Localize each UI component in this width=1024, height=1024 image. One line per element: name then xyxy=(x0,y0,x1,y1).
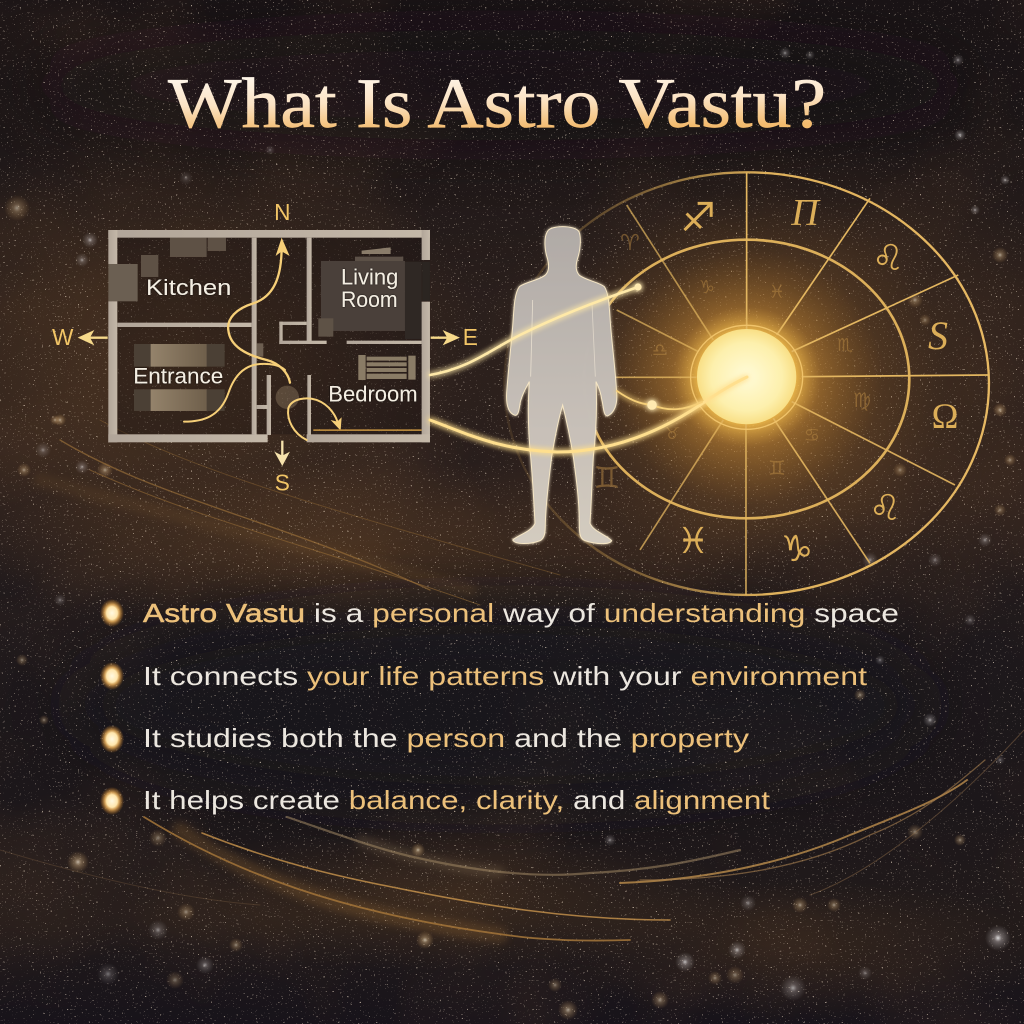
kitchen furniture xyxy=(108,238,226,301)
sun ring xyxy=(691,325,803,429)
room labels: Living xyxy=(341,265,398,290)
outer zodiac glyphs: ♑ xyxy=(781,529,813,570)
energy lines linking plan, person and wheel xyxy=(430,283,747,452)
room labels xyxy=(133,265,418,406)
energy flow arrows xyxy=(184,238,422,440)
bullet 4: It helps create balance, clarity, and alignment xyxy=(143,785,771,815)
inner zodiac glyphs: ♊ xyxy=(768,456,786,480)
living room furniture xyxy=(318,247,422,339)
room labels: Room xyxy=(341,287,398,312)
floor plan xyxy=(52,199,478,496)
human silhouette xyxy=(507,227,617,544)
plan walls xyxy=(108,230,430,442)
outer zodiac glyphs: ♊ xyxy=(594,461,620,496)
outer zodiac glyphs: Ω xyxy=(932,396,958,436)
room labels: Bedroom xyxy=(328,381,418,406)
room labels: Entrance xyxy=(133,363,223,388)
compass: west xyxy=(52,324,108,350)
sun glow xyxy=(612,249,882,505)
compass: west: W xyxy=(52,324,74,350)
bullet 2: It connects your life patterns with your environment xyxy=(143,661,868,691)
background: sweeping gold light trails xyxy=(0,420,1024,941)
plan interior tint xyxy=(117,238,422,434)
outer ring xyxy=(504,172,989,595)
bullet 1: Astro Vastu is a personal way of understanding space xyxy=(143,598,899,628)
outer zodiac glyphs xyxy=(594,192,958,570)
compass: north: N xyxy=(274,199,290,225)
inner zodiac glyphs: ♉ xyxy=(665,424,679,443)
inner zodiac glyphs: ♋ xyxy=(804,425,820,446)
outer zodiac glyphs: ♐ xyxy=(680,195,716,241)
title: What Is Astro Vastu? xyxy=(168,65,826,143)
entrance furniture xyxy=(134,344,225,411)
compass: east: E xyxy=(463,324,478,350)
inner zodiac glyphs: ♏ xyxy=(837,335,853,356)
outer zodiac glyphs: S xyxy=(928,313,948,358)
bedroom furniture xyxy=(358,355,416,380)
outer zodiac glyphs: ♌ xyxy=(869,488,901,529)
outer zodiac glyphs: ♈ xyxy=(620,231,640,256)
outer zodiac glyphs: ♌ xyxy=(872,238,904,279)
compass: south xyxy=(274,441,290,496)
bullet list xyxy=(100,598,899,815)
room labels: Kitchen xyxy=(146,275,231,300)
sun xyxy=(697,329,796,424)
inner zodiac glyphs: ♓ xyxy=(769,282,785,303)
inner zodiac glyphs: ♎ xyxy=(652,340,668,361)
inner zodiac glyphs: ♑ xyxy=(699,277,715,298)
inner zodiac glyphs: ♍ xyxy=(853,388,871,412)
outer zodiac glyphs: Π xyxy=(790,192,821,234)
door swing xyxy=(276,386,299,409)
inner zodiac glyphs xyxy=(652,277,871,480)
outer zodiac glyphs: ♓ xyxy=(677,521,709,562)
bullet 3: It studies both the person and the property xyxy=(143,723,749,753)
spokes xyxy=(615,173,988,595)
inner ring xyxy=(584,240,909,518)
astrology wheel xyxy=(504,172,989,595)
compass: south: S xyxy=(275,470,290,496)
compass: east xyxy=(431,324,478,350)
